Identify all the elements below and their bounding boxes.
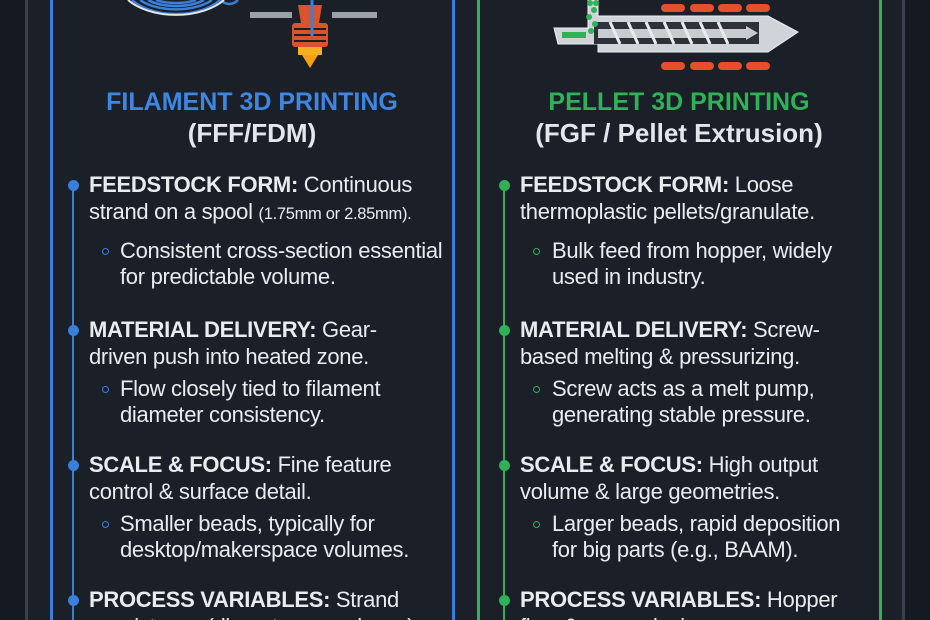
panel: pellet <box>477 0 882 620</box>
timeline: filament <box>72 185 74 620</box>
list: filament: for predictable volume. <box>120 264 336 289</box>
list: filament: Consistent cross-section essential <box>120 238 442 263</box>
list: pellet: used in industry. <box>552 264 705 289</box>
subtitle: pellet: (FGF / Pellet Extrusion) <box>535 118 823 148</box>
list: pellet: Larger beads, rapid deposition <box>552 511 840 536</box>
panel: filament <box>50 0 455 620</box>
list: pellet: based melting & pressurizing. <box>520 344 800 369</box>
list: filament: strand on a spool (1.75mm or 2.85mm). <box>89 199 411 224</box>
list: pellet: thermoplastic pellets/granulate. <box>520 199 815 224</box>
icon: filament spool and hotend <box>127 0 377 68</box>
subtitle: filament: (FFF/FDM) <box>188 118 316 148</box>
list: filament: MATERIAL DELIVERY: Gear- <box>89 317 377 342</box>
list: pellet: generating stable pressure. <box>552 402 811 427</box>
list: filament: FEEDSTOCK FORM: Continuous <box>89 172 412 197</box>
list: pellet: for big parts (e.g., BAAM). <box>552 537 798 562</box>
list: pellet: MATERIAL DELIVERY: Screw- <box>520 317 820 342</box>
list: filament: Flow closely tied to filament <box>120 376 380 401</box>
list: filament: desktop/makerspace volumes. <box>120 537 409 562</box>
list: pellet: PROCESS VARIABLES: Hopper <box>520 587 837 612</box>
list: filament: PROCESS VARIABLES: Strand <box>89 587 399 612</box>
list: filament: diameter consistency. <box>120 402 325 427</box>
list: filament: driven push into heated zone. <box>89 344 369 369</box>
list: pellet: FEEDSTOCK FORM: Loose <box>520 172 793 197</box>
title: pellet: PELLET 3D PRINTING <box>548 88 810 116</box>
timeline: pellet <box>503 185 505 620</box>
list: pellet: Bulk feed from hopper, widely <box>552 238 832 263</box>
list: filament: SCALE & FOCUS: Fine feature <box>89 452 391 477</box>
list: pellet <box>499 172 840 620</box>
list: filament <box>68 172 442 620</box>
list: filament: control & surface detail. <box>89 479 311 504</box>
title: filament: FILAMENT 3D PRINTING <box>106 88 398 116</box>
icon: screw extruder <box>553 0 799 70</box>
list: pellet: Screw acts as a melt pump, <box>552 376 814 401</box>
list: pellet: volume & large geometries. <box>520 479 780 504</box>
list: filament: Smaller beads, typically for <box>120 511 374 536</box>
list: pellet: SCALE & FOCUS: High output <box>520 452 818 477</box>
